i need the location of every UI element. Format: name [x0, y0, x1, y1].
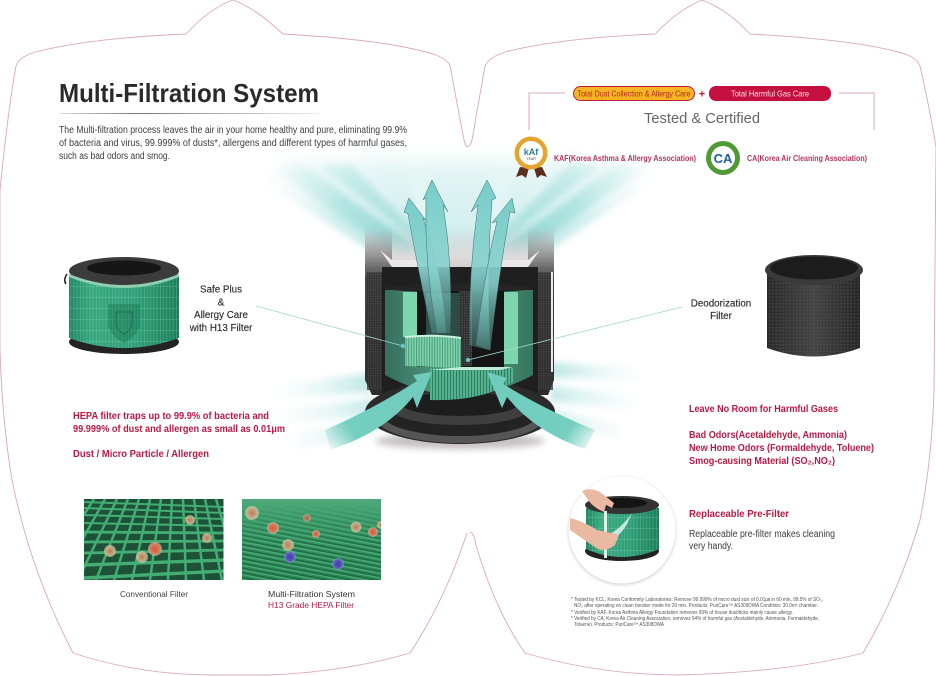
pre-filter heading: Replaceable Pre-Filter — [689, 508, 789, 520]
arrows: clean air rising — [404, 180, 515, 350]
image: conventional filter — [84, 499, 224, 580]
arrow inner right — [470, 180, 496, 350]
HEPA text — [73, 410, 285, 460]
footnotes — [571, 597, 823, 628]
KAF text: KAF(Korea Asthma & Allergy Association) — [554, 153, 696, 163]
icon: KAF badge: YEAR — [526, 157, 536, 161]
footnotes: NO₂ after operating on clean booster mode for 20 min. Products: PuriCare™ AS309DWA Condition: 30.0m³ chamber. — [574, 603, 818, 609]
caption: conventional filter: Conventional Filter — [120, 589, 188, 599]
arrow inner left — [423, 180, 451, 333]
base rings — [365, 380, 555, 444]
intro text: The Multi-filtration process leaves the air in your home healthy and pure, eliminating 99.9% — [59, 125, 407, 136]
pill: total dust collection — [574, 86, 694, 100]
arrow outer left — [404, 198, 446, 333]
HEPA text: Dust / Micro Particle / Allergen — [73, 448, 209, 460]
gas text: Smog-causing Material (SO₂,NO₂) — [689, 455, 835, 467]
label: HEPA filter: Safe Plus — [200, 284, 242, 296]
dark interior — [382, 267, 538, 397]
arrow: air intake left — [325, 372, 432, 450]
intro text: of bacteria and virus, 99.999% of dusts*, allergens and different types of harmful gases, — [59, 138, 407, 149]
upright slab right — [504, 292, 518, 364]
gas text: Bad Odors(Acetaldehyde, Ammonia) — [689, 429, 847, 441]
pre-filter text: Replaceable pre-filter makes cleaning — [689, 529, 835, 540]
pill: total harmful gas: Total Harmful Gas Care — [731, 90, 810, 98]
plus sign: + — [699, 88, 705, 100]
filter cylinder outer — [385, 290, 533, 395]
intro text: such as bad odors and smog. — [59, 151, 170, 162]
pill: total harmful gas — [709, 86, 831, 101]
label: deodorization filter: Filter — [710, 311, 733, 322]
arrow outer right — [476, 198, 515, 350]
image: H13 HEPA filter — [242, 499, 385, 580]
caption: H13 filter — [268, 589, 355, 610]
icon: KAF badge: kAf — [524, 147, 539, 157]
housing walls — [365, 228, 392, 395]
intro text — [59, 125, 407, 162]
footnotes: Toluene). Products: PuriCare™ AS308DWA — [574, 622, 665, 628]
heading: tested and certified: Tested & Certified — [644, 110, 760, 127]
pleats lower — [430, 368, 513, 400]
purifier cutaway — [365, 228, 555, 449]
air rays: upper fan — [262, 160, 655, 270]
gas text — [689, 403, 874, 467]
label: HEPA filter — [189, 284, 253, 334]
footnotes: * Verified by KAF, Korea Asthma Allergy Foundation removes 99% of house dust/ticks mainly cause allergy. — [571, 610, 793, 616]
pre-filter text: very handy. — [689, 541, 733, 552]
pill: total dust collection: Total Dust Collection & Allergy Care — [578, 90, 691, 98]
leader line: HEPA filter — [256, 306, 405, 348]
footnotes: * Tested by KCL, Korea Conformity Laboratories: Remove 99.999% of micro dust size of 0.01㎛ in 60 min, 99.5% of SO₂, — [571, 597, 823, 603]
dome top — [365, 228, 554, 270]
HEPA text: 99.999% of dust and allergen as small as 0.01μm — [73, 423, 285, 435]
upright slab left — [403, 292, 417, 337]
title: Multi-Filtration System — [59, 78, 319, 108]
HEPA text: HEPA filter traps up to 99.9% of bacteria and — [73, 410, 269, 422]
icon: CA badge — [706, 141, 740, 175]
rim highlights — [380, 250, 424, 267]
hand bottom — [570, 518, 619, 550]
arrow: air intake right — [487, 372, 595, 449]
icon: black deodorization filter — [765, 255, 863, 356]
gas text: New Home Odors (Formaldehyde, Toluene) — [689, 442, 874, 454]
label: HEPA filter: with H13 Filter — [189, 323, 253, 334]
pre-filter text — [689, 529, 835, 552]
footnotes: * Verified by CA, Korea Air Cleaning Association, removes 94% of harmful gas (Acetaldehyde, Ammonia, Formaldehyde, — [571, 616, 819, 622]
icon: green HEPA filter — [65, 257, 179, 354]
bracket — [529, 93, 874, 130]
leader line: deodorization filter — [466, 307, 682, 362]
caption: H13 filter: H13 Grade HEPA Filter — [268, 600, 354, 610]
filter cutaway centre with mesh — [417, 291, 504, 367]
hand top — [582, 489, 614, 512]
panel outline: left — [0, 0, 467, 675]
air rays: lower fan — [260, 362, 650, 450]
icon: KAF badge — [514, 136, 548, 178]
particles — [245, 506, 385, 570]
base shadow — [375, 433, 545, 449]
particles — [104, 515, 212, 563]
image: replacing the pre-filter — [568, 476, 676, 584]
label: HEPA filter: & — [218, 298, 225, 308]
label: deodorization filter — [691, 298, 751, 322]
label: deodorization filter: Deodorization — [691, 298, 751, 310]
pleats front — [405, 335, 461, 368]
caption: H13 filter: Multi-Filtration System — [268, 589, 355, 599]
panel outline: right — [467, 0, 936, 675]
CA text: CA(Korea Air Cleaning Association) — [747, 153, 867, 163]
gas text: Leave No Room for Harmful Gases — [689, 403, 838, 415]
icon: CA badge: CA — [714, 151, 733, 166]
label: HEPA filter: Allergy Care — [194, 310, 249, 321]
